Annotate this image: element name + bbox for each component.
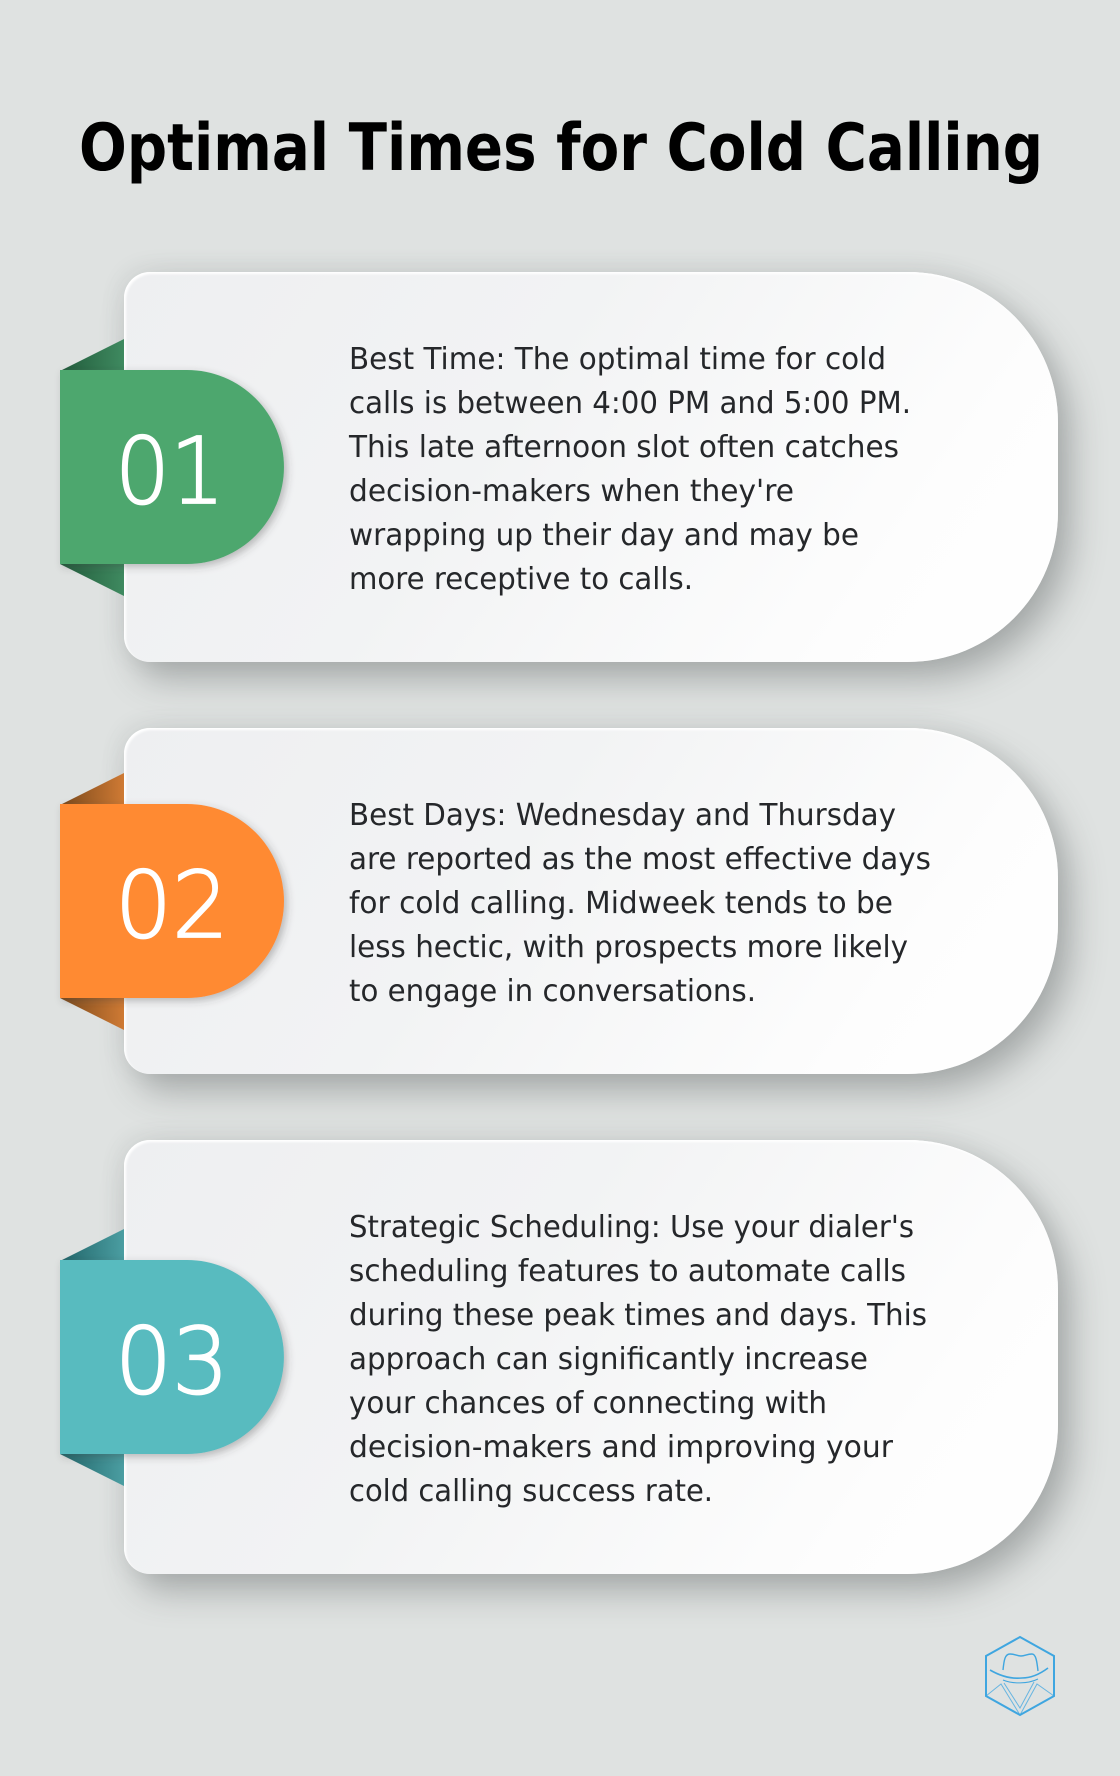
badge 02: 02 xyxy=(115,852,229,959)
panel: strategic scheduling xyxy=(58,1131,1089,1609)
body text: best time: more receptive to calls. xyxy=(349,562,693,597)
panel: best time xyxy=(58,263,1089,697)
body text: strategic scheduling: approach can significantly increase xyxy=(349,1342,868,1377)
body text: best time: Best Time: The optimal time for cold xyxy=(349,342,886,377)
card background 3 xyxy=(124,1140,1058,1574)
body text: best time: decision-makers when they're xyxy=(349,474,794,509)
panel: best days xyxy=(58,719,1089,1109)
body text: best days: less hectic, with prospects more likely xyxy=(349,930,908,965)
body text: best time: wrapping up their day and may be xyxy=(349,518,859,553)
body text: strategic scheduling: cold calling success rate. xyxy=(349,1474,713,1509)
badge 01: 01 xyxy=(115,418,225,525)
body text: best days: are reported as the most effective days xyxy=(349,842,931,877)
body text: strategic scheduling: scheduling features to automate calls xyxy=(349,1254,906,1289)
body text: best days xyxy=(349,798,931,1009)
icon: logo hexagon with spy hat xyxy=(985,1636,1055,1716)
badge 01 xyxy=(58,339,292,596)
badge 02 xyxy=(58,773,292,1030)
card background 1 xyxy=(124,272,1058,662)
card background 2 xyxy=(124,728,1058,1074)
body text: strategic scheduling: your chances of connecting with xyxy=(349,1386,827,1421)
body text: strategic scheduling: decision-makers and improving your xyxy=(349,1430,893,1465)
body text: best days: Best Days: Wednesday and Thursday xyxy=(349,798,896,833)
body text: strategic scheduling xyxy=(349,1210,927,1509)
body text: best days: for cold calling. Midweek tends to be xyxy=(349,886,893,921)
body text: best time xyxy=(348,342,911,597)
body text: strategic scheduling: during these peak times and days. This xyxy=(349,1298,927,1333)
body text: best time: This late afternoon slot often catches xyxy=(348,430,899,465)
badge 03 xyxy=(58,1229,292,1486)
badge 03: 03 xyxy=(115,1308,229,1415)
body text: strategic scheduling: Strategic Scheduling: Use your dialer's xyxy=(349,1210,914,1245)
body text: best days: to engage in conversations. xyxy=(349,974,756,1009)
body text: best time: calls is between 4:00 PM and 5:00 PM. xyxy=(349,386,911,421)
